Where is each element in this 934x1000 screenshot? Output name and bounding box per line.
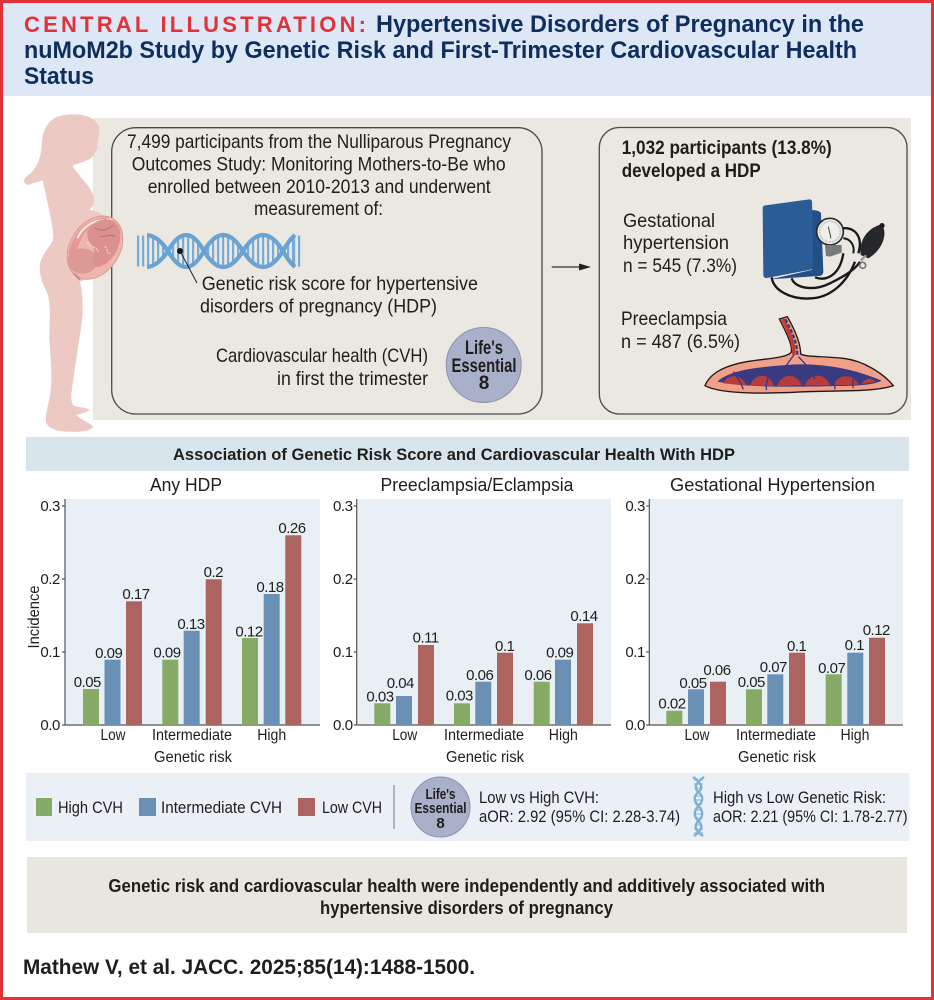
y axis ticks: 0.3 [625, 498, 645, 515]
y axis ticks: 0.3 [40, 498, 60, 515]
genetic risk odds ratio text [713, 788, 908, 826]
gestational hypertension text: Gestational [623, 210, 715, 232]
cardiovascular health text: in first the trimester [277, 368, 428, 390]
y axis label: Incidence [26, 585, 43, 648]
chart title: Preeclampsia/Eclampsia [380, 474, 574, 495]
preeclampsia text: Preeclampsia [621, 308, 727, 330]
chart: Any HDP [26, 474, 320, 766]
panel: outcomes [599, 128, 907, 414]
y axis ticks [333, 498, 353, 734]
value labels: 0.14 [570, 608, 598, 625]
gestational hypertension text: n = 545 (7.3%) [623, 255, 737, 277]
value labels: 0.07 [760, 659, 787, 676]
value labels: 0.06 [703, 662, 731, 679]
value labels [366, 608, 598, 706]
icon: placenta [705, 317, 893, 393]
legend: CVH categories [36, 798, 382, 817]
study description text: enrolled between 2010-2013 and underwent [148, 176, 491, 198]
genetic risk score text [200, 273, 478, 318]
title [24, 11, 864, 90]
genetic risk odds ratio text: High vs Low Genetic Risk: [713, 788, 886, 807]
bars [666, 638, 885, 725]
chart: Gestational Hypertension [625, 474, 903, 766]
title: nuMoM2b Study by Genetic Risk and First-Trimester Cardiovascular Health [24, 37, 857, 64]
study description text: measurement of: [254, 198, 383, 220]
x axis labels: Low [100, 727, 126, 744]
value labels: 0.13 [177, 616, 205, 633]
value labels: 0.05 [74, 674, 101, 691]
y axis ticks: 0.3 [333, 498, 353, 515]
icon: Life's Essential 8 small badge: Life's [426, 786, 456, 803]
study description text: Outcomes Study: Monitoring Mothers-to-Be who [132, 154, 506, 176]
study description text: 7,499 participants from the Nulliparous Pregnancy [127, 131, 511, 153]
icon: Life's Essential 8 small badge: 8 [436, 815, 445, 832]
value labels: 0.04 [387, 675, 414, 692]
panel: study population [112, 128, 542, 414]
CVH odds ratio text [479, 788, 680, 826]
value labels: 0.09 [546, 645, 573, 662]
value labels: 0.17 [122, 586, 150, 603]
value labels: 0.07 [818, 660, 845, 677]
conclusion panel: hypertensive disorders of pregnancy [320, 897, 614, 918]
icon: fetus in womb [56, 206, 134, 290]
x axis labels: High [257, 727, 286, 744]
y axis ticks: 0.2 [40, 571, 60, 588]
value labels: 0.1 [495, 638, 515, 655]
x axis labels [392, 727, 578, 766]
value labels: 0.12 [863, 622, 890, 639]
icon: Life's Essential 8 badge: Life's [465, 338, 503, 359]
x axis labels: Intermediate [444, 727, 524, 744]
value labels: 0.06 [524, 667, 552, 684]
conclusion panel [27, 857, 907, 933]
x axis labels: Genetic risk [738, 749, 816, 766]
outcomes headline: developed a HDP [622, 160, 761, 182]
icon: Life's Essential 8 badge: 8 [479, 373, 489, 394]
x axis labels [684, 727, 870, 766]
y axis ticks: 0.1 [625, 644, 645, 661]
y axis ticks: 0.1 [40, 644, 60, 661]
icon: DNA helix [137, 235, 303, 283]
x axis labels: High [840, 727, 870, 744]
genetic risk score text: Genetic risk score for hypertensive [202, 273, 478, 295]
genetic risk score text: disorders of pregnancy (HDP) [200, 296, 437, 318]
value labels [658, 622, 890, 713]
gestational hypertension text [623, 210, 737, 277]
arrow [552, 264, 591, 270]
value labels: 0.03 [446, 688, 473, 705]
value labels: 0.12 [235, 624, 263, 641]
y axis ticks [625, 498, 645, 734]
x axis labels: Genetic risk [154, 749, 232, 766]
x axis labels: Low [392, 727, 418, 744]
legend: CVH categories: High CVH [58, 798, 123, 817]
value labels: 0.11 [413, 630, 439, 647]
preeclampsia text: n = 487 (6.5%) [621, 331, 740, 353]
x axis labels: Intermediate [736, 727, 816, 744]
icon: pregnant woman silhouette [24, 114, 134, 432]
title: CENTRAL ILLUSTRATION: [24, 12, 366, 37]
icon: small DNA helix [693, 777, 704, 836]
conclusion panel: Genetic risk and cardiovascular health were independently and additively associated with [108, 875, 825, 896]
value labels: 0.09 [153, 645, 181, 662]
section heading band: Association of Genetic Risk Score and Cardiovascular Health With HDP [173, 445, 735, 464]
y axis ticks: 0.0 [333, 717, 353, 734]
value labels: 0.1 [787, 638, 807, 655]
y axis ticks: 0.2 [625, 571, 645, 588]
y axis ticks: 0.0 [40, 717, 60, 734]
citation: Mathew V, et al. JACC. 2025;85(14):1488-1500. [23, 956, 475, 979]
x axis labels: Genetic risk [446, 749, 524, 766]
icon: Life's Essential 8 small badge [411, 777, 470, 837]
legend: CVH categories: Low CVH [322, 798, 382, 817]
chart: Preeclampsia/Eclampsia [333, 474, 611, 766]
cardiovascular health text: Cardiovascular health (CVH) [216, 345, 428, 367]
section heading band [26, 437, 909, 471]
study description text [127, 131, 511, 220]
value labels: 0.02 [658, 696, 686, 713]
value labels [74, 520, 306, 691]
value labels: 0.06 [466, 667, 493, 684]
gestational hypertension text: hypertension [623, 232, 729, 254]
value labels: 0.05 [738, 674, 765, 691]
value labels: 0.09 [95, 645, 122, 662]
y axis ticks [40, 498, 60, 734]
outcomes headline [622, 137, 832, 182]
bars [83, 535, 301, 725]
icon: Life's Essential 8 badge: Essential [452, 356, 516, 377]
icon: Life's Essential 8 badge [446, 328, 521, 402]
value labels: 0.1 [845, 637, 864, 654]
legend: CVH categories: Intermediate CVH [161, 798, 282, 817]
value labels: 0.26 [278, 520, 306, 537]
icon: Life's Essential 8 small badge: Essential [414, 800, 466, 817]
CVH odds ratio text: Low vs High CVH: [479, 788, 599, 807]
value labels: 0.2 [204, 564, 223, 581]
value labels: 0.03 [366, 689, 394, 706]
value labels: 0.18 [256, 579, 284, 596]
chart title: Gestational Hypertension [670, 474, 875, 495]
panel: study overview background [93, 118, 911, 420]
header band [3, 3, 931, 96]
CVH odds ratio text: aOR: 2.92 (95% CI: 2.28-3.74) [479, 807, 680, 826]
y axis ticks: 0.2 [333, 571, 353, 588]
x axis labels: Low [684, 727, 710, 744]
title: Hypertensive Disorders of Pregnancy in the [376, 11, 864, 38]
title: Status [24, 63, 94, 90]
value labels: 0.05 [679, 675, 707, 692]
bars [374, 623, 593, 725]
legend panel [26, 773, 910, 841]
chart title: Any HDP [150, 474, 222, 495]
x axis labels: High [549, 727, 578, 744]
y axis ticks: 0.1 [333, 644, 353, 661]
outcomes headline: 1,032 participants (13.8%) [622, 137, 832, 159]
icon: blood pressure cuff [763, 199, 885, 299]
cardiovascular health text [216, 345, 428, 390]
x axis labels [100, 727, 286, 766]
preeclampsia text [621, 308, 740, 353]
x axis labels: Intermediate [152, 727, 232, 744]
y axis ticks: 0.0 [625, 717, 645, 734]
